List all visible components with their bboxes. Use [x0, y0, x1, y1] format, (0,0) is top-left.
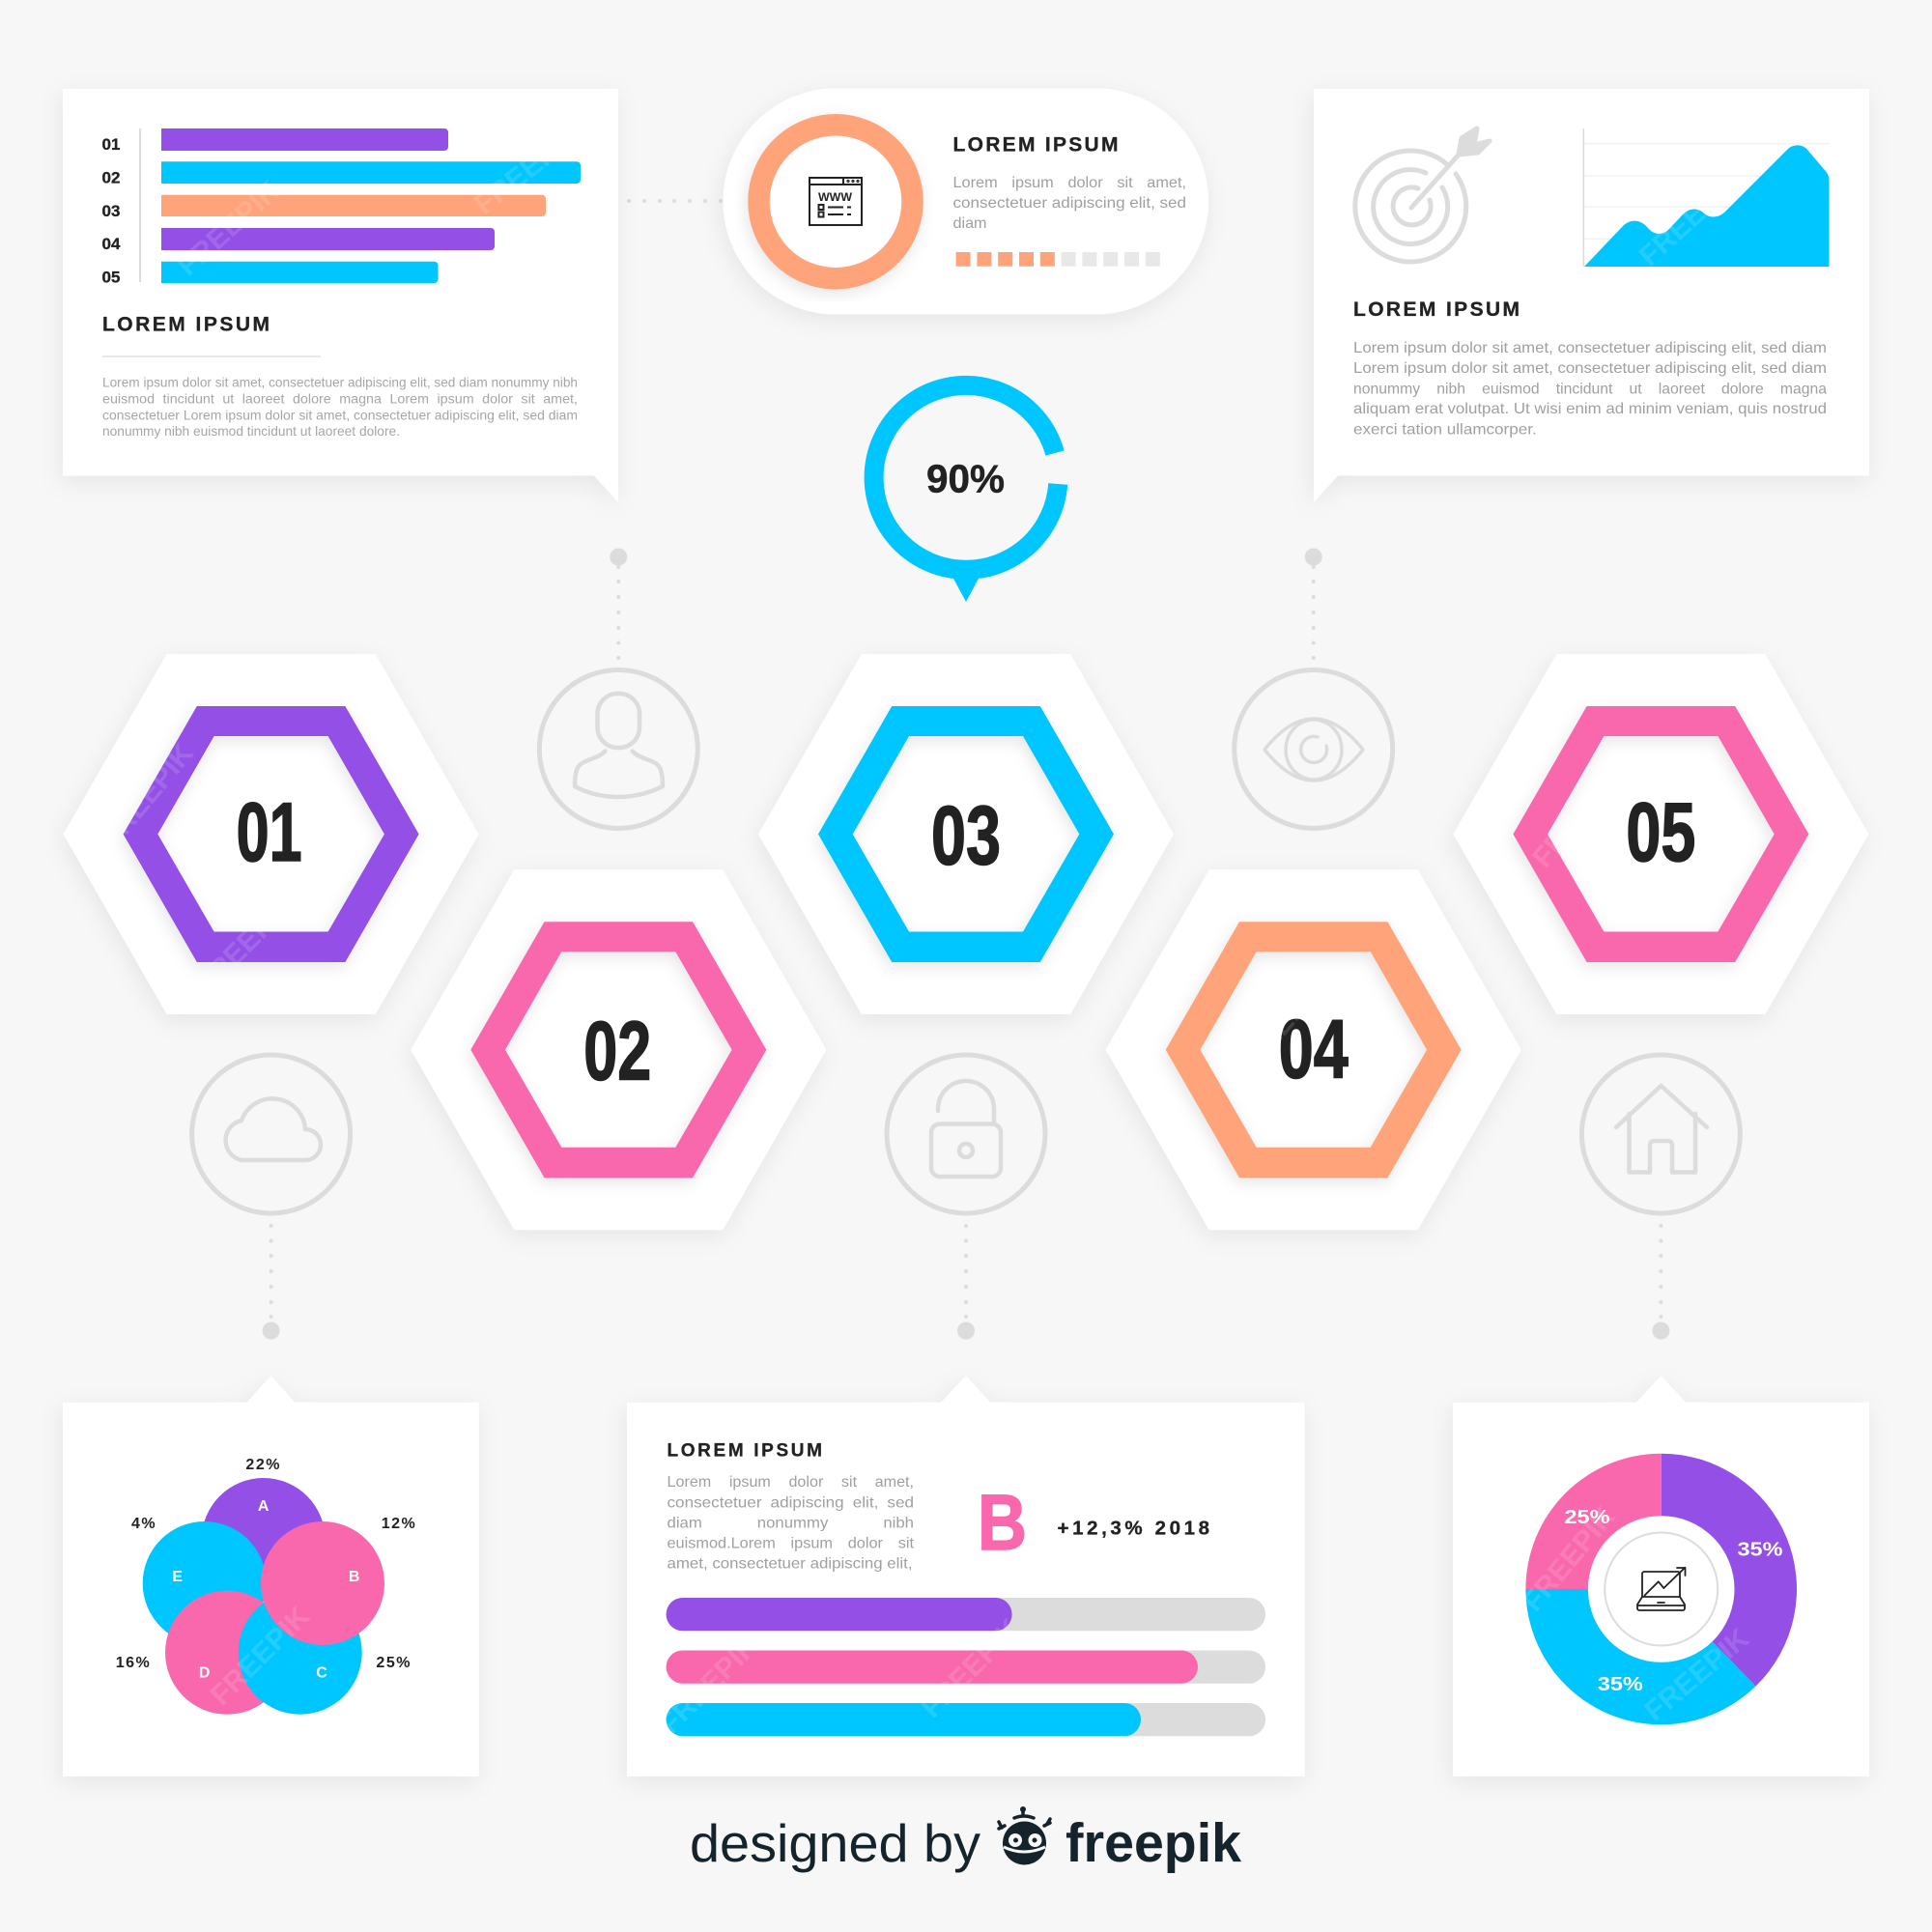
- icon: person: [539, 670, 697, 829]
- panel: venn card: [63, 1376, 479, 1776]
- connector: panel to pill: [627, 199, 723, 203]
- venn chart: D: [199, 1665, 210, 1682]
- donut chart: 25%: [1565, 1506, 1609, 1528]
- watermarks: [95, 118, 1755, 1741]
- panel: hexagon 04: 04: [1279, 1004, 1349, 1096]
- watermarks: FREEPIK: [469, 118, 587, 221]
- watermarks: FREEPIK: [1638, 1622, 1755, 1727]
- watermarks: FREEPIK: [205, 1600, 316, 1712]
- text block: Lorem ipsum dolor sit amet, consectetuer adipiscing elit, sed diam: [1353, 360, 1827, 377]
- big letter B: B: [978, 1479, 1027, 1567]
- icon: www window: [810, 178, 862, 225]
- text block: nonummy nibh euismod tincidunt ut laoreet dolore magna: [1353, 381, 1827, 397]
- icon: eye: [1235, 670, 1393, 829]
- text block: consectetuer adipiscing elit, sed: [952, 195, 1186, 212]
- connector: cloud down to card: [263, 1224, 280, 1339]
- panel: hexagon 05: 05: [1626, 786, 1695, 879]
- progress bars: [667, 1598, 1265, 1736]
- panel: donut card: [1453, 1376, 1869, 1776]
- bar chart: 05: [102, 269, 120, 286]
- text block: [102, 375, 578, 439]
- panel: bar chart card: [63, 89, 618, 502]
- watermarks: FREEPIK: [916, 1612, 1027, 1724]
- icon: laptop with chart: [1637, 1568, 1685, 1610]
- text block: Lorem ipsum dolor sit amet, consectetuer adipiscing elit, sed diam nonummy nibh: [102, 375, 578, 390]
- text block: exerci tation ullamcorper.: [1353, 421, 1537, 438]
- bar chart: 04: [102, 235, 121, 253]
- bar chart: 03: [102, 202, 120, 220]
- icon: www window: WWW: [818, 190, 853, 204]
- footer: designed by freepik: [690, 1806, 1241, 1874]
- venn chart: [116, 1457, 416, 1715]
- orange ring: [759, 125, 912, 278]
- text block: nonummy nibh euismod tincidunt ut laoreet dolore.: [102, 423, 400, 439]
- heading: LOREM IPSUM: [952, 133, 1119, 156]
- text block: Lorem ipsum dolor sit amet, consectetuer adipiscing elit, sed diam: [1353, 340, 1827, 356]
- icon: freepik robot: [999, 1806, 1050, 1864]
- text block: aliquam erat volutpat. Ut wisi enim ad minim veniam, quis nostrud: [1353, 401, 1827, 417]
- panel: hexagon 04: [1106, 869, 1521, 1230]
- watermarks: FREEPIK: [1517, 1500, 1622, 1617]
- footer: designed by freepik: freepik: [1065, 1812, 1241, 1874]
- panel: hexagon 02: 02: [583, 1006, 651, 1098]
- footer: designed by freepik: designed by: [690, 1813, 981, 1873]
- venn chart: 4%: [131, 1516, 156, 1532]
- connector: lock down to card: [957, 1224, 975, 1339]
- heading: LOREM IPSUM: [102, 313, 270, 336]
- watermarks: FREEPIK: [654, 1629, 765, 1741]
- text block: [952, 175, 1186, 232]
- text block: consectetuer adipiscing elit, sed: [667, 1495, 914, 1512]
- text block: consectetuer Lorem ipsum dolor sit amet, consectetuer adipiscing elit, sed diam: [102, 407, 578, 422]
- text block: [667, 1474, 915, 1573]
- venn chart: A: [258, 1498, 270, 1515]
- venn chart: C: [316, 1665, 327, 1682]
- watermarks: FREEPIK: [190, 888, 301, 1000]
- bar chart: 01: [102, 135, 120, 154]
- venn chart: 12%: [382, 1516, 416, 1532]
- callout: 90% ring: [874, 385, 1058, 602]
- text block: euismod.Lorem ipsum dolor sit: [667, 1536, 915, 1552]
- venn chart: 22%: [245, 1457, 281, 1473]
- panel: hexagon 03: [758, 654, 1174, 1014]
- connector: home down to card: [1652, 1224, 1669, 1339]
- bar chart: 02: [102, 168, 120, 187]
- panel: area chart card: [1314, 89, 1869, 502]
- bar chart: [102, 128, 581, 286]
- text block: diam nonummy nibh: [667, 1516, 914, 1532]
- icon: house: [1581, 1055, 1740, 1213]
- donut chart: [1525, 1454, 1797, 1724]
- icon: cloud: [192, 1055, 351, 1213]
- panel: hexagon 01: [64, 654, 479, 1014]
- text block: amet, consectetuer adipiscing elit,: [667, 1556, 912, 1573]
- area chart: [1582, 128, 1830, 267]
- panel: pill card: [723, 89, 1208, 315]
- watermarks: FREEPIK: [1227, 969, 1332, 1086]
- callout: 90% ring: 90%: [926, 456, 1005, 500]
- text block: Lorem ipsum dolor sit amet,: [952, 175, 1186, 191]
- icon: target with arrow: [1355, 128, 1490, 262]
- donut chart: 35%: [1737, 1539, 1783, 1561]
- watermarks: FREEPIK: [95, 737, 200, 854]
- venn chart: B: [349, 1569, 359, 1585]
- watermarks: FREEPIK: [172, 174, 287, 282]
- venn chart: 16%: [116, 1655, 151, 1671]
- heading: LOREM IPSUM: [667, 1441, 822, 1462]
- panel: hexagon 02: [411, 869, 826, 1230]
- panel: hexagon 05: [1453, 654, 1868, 1014]
- text block: Lorem ipsum dolor sit amet,: [667, 1474, 914, 1491]
- panel: hexagon 03: 03: [931, 790, 1001, 883]
- text block: [1353, 340, 1827, 438]
- donut chart: 35%: [1598, 1673, 1643, 1695]
- connector: person up to card: [610, 549, 627, 660]
- stat: +12,3% 2018: [1057, 1517, 1209, 1539]
- venn chart: E: [172, 1569, 183, 1585]
- text block: euismod tincidunt ut laoreet dolore magna Lorem ipsum dolor sit amet,: [102, 390, 578, 406]
- watermarks: FREEPIK: [1634, 164, 1748, 272]
- progress squares: [956, 252, 1160, 267]
- connector: eye up to card: [1305, 549, 1322, 660]
- venn chart: 25%: [376, 1655, 412, 1671]
- panel: hexagon 01: 01: [237, 786, 302, 879]
- text block: diam: [952, 215, 987, 232]
- watermarks: FREEPIK: [1526, 756, 1632, 873]
- heading: LOREM IPSUM: [1353, 298, 1520, 321]
- panel: progress card: [627, 1376, 1305, 1776]
- icon: open lock: [887, 1055, 1045, 1213]
